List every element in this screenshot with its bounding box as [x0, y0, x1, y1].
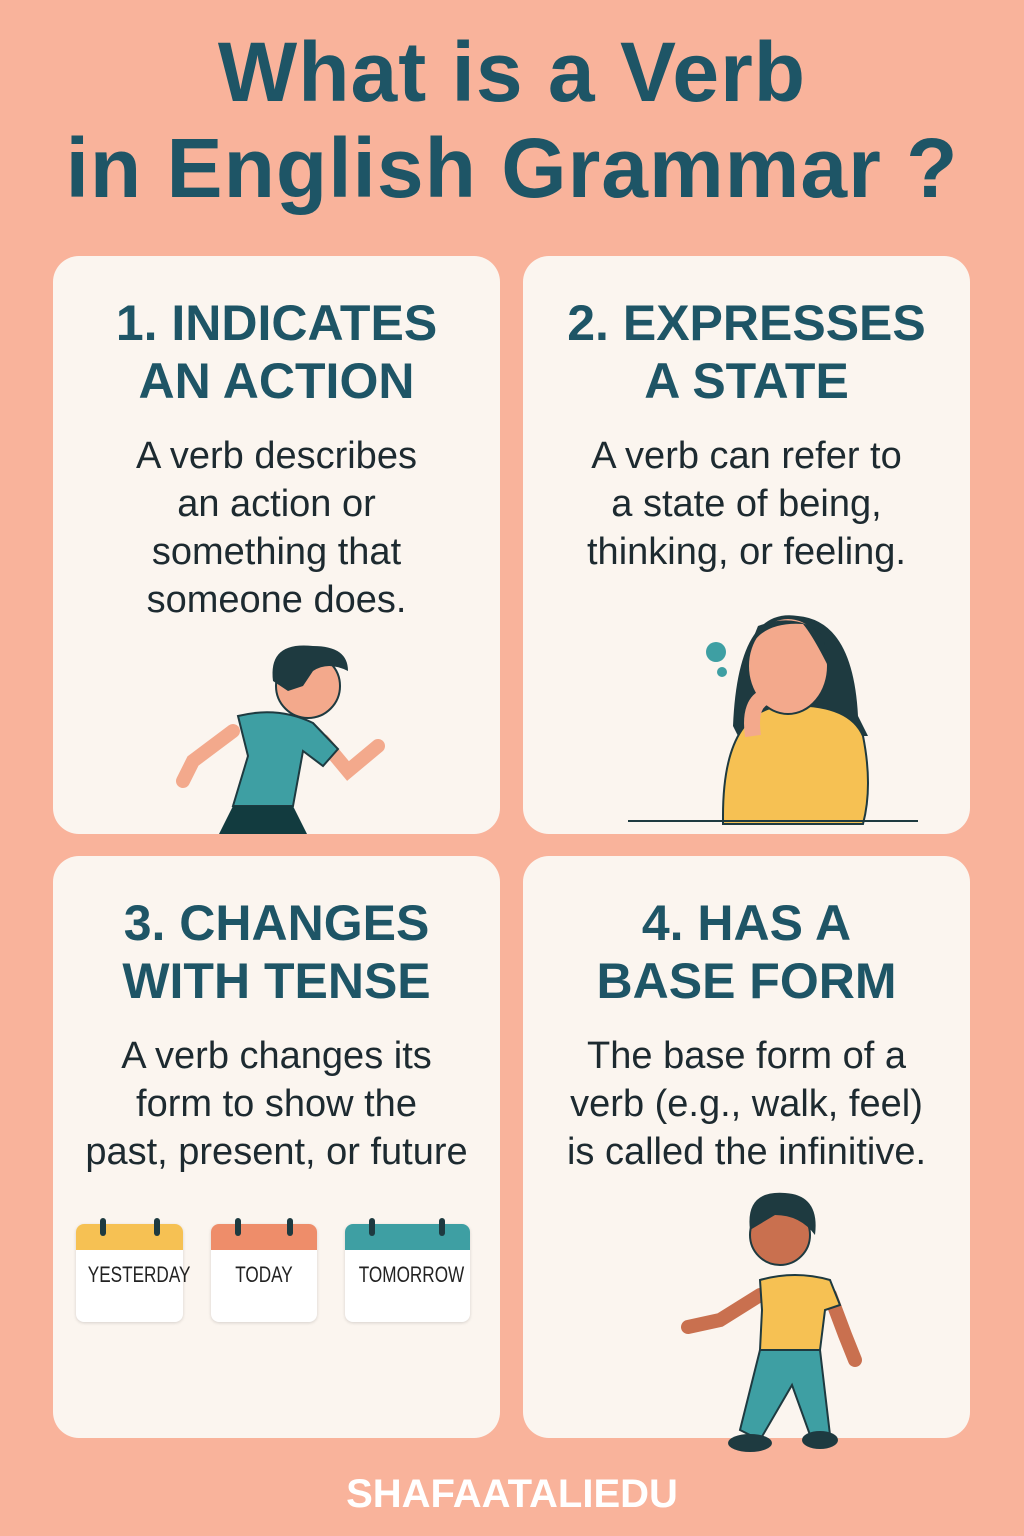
text 4: [567, 1035, 926, 1173]
title: [66, 25, 958, 215]
text 2: a state of being,: [611, 483, 882, 525]
heading 2: 2. EXPRESSES: [567, 295, 926, 351]
text 1: [136, 435, 417, 621]
footer: SHAFAATALIEDU: [346, 1472, 678, 1516]
title: in English Grammar ?: [66, 121, 958, 215]
heading 4: [596, 895, 896, 1009]
text 2: A verb can refer to: [591, 435, 902, 477]
calendar: yesterday: YESTERDAY: [88, 1262, 190, 1287]
heading 1: 1. INDICATES: [116, 295, 437, 351]
text 2: [587, 435, 906, 573]
heading 2: [567, 295, 926, 409]
icon: thinking woman: [628, 615, 918, 825]
text 1: A verb describes: [136, 435, 417, 477]
text 4: verb (e.g., walk, feel): [570, 1083, 923, 1125]
heading 4: 4. HAS A: [642, 895, 851, 951]
text 1: an action or: [177, 483, 376, 525]
calendar: today: [211, 1224, 317, 1322]
text 4: is called the infinitive.: [567, 1131, 926, 1173]
calendar: today: TODAY: [235, 1262, 293, 1287]
panel: has a base form: [523, 856, 970, 1438]
text 3: form to show the: [136, 1083, 417, 1125]
title: What is a Verb: [218, 25, 806, 119]
panel: indicates an action: [53, 256, 500, 834]
text 2: thinking, or feeling.: [587, 531, 906, 573]
text 4: The base form of a: [587, 1035, 906, 1077]
icon: walking boy: [681, 1192, 862, 1452]
panel: changes with tense: [53, 856, 500, 1438]
heading 1: AN ACTION: [139, 353, 414, 409]
heading 3: [122, 895, 431, 1009]
calendar: tomorrow: TOMORROW: [359, 1262, 464, 1287]
panel: expresses a state: [523, 256, 970, 834]
heading 1: [116, 295, 437, 409]
icon: running boy: [176, 646, 385, 834]
heading 3: WITH TENSE: [122, 953, 431, 1009]
text 3: past, present, or future: [85, 1131, 468, 1173]
heading 3: 3. CHANGES: [124, 895, 429, 951]
calendar: yesterday: [76, 1224, 183, 1322]
text 1: something that: [152, 531, 401, 573]
heading 2: A STATE: [644, 353, 849, 409]
heading 4: BASE FORM: [596, 953, 896, 1009]
text 1: someone does.: [147, 579, 406, 621]
text 3: A verb changes its: [121, 1035, 432, 1077]
text 3: [85, 1035, 468, 1173]
calendar: tomorrow: [345, 1224, 470, 1322]
